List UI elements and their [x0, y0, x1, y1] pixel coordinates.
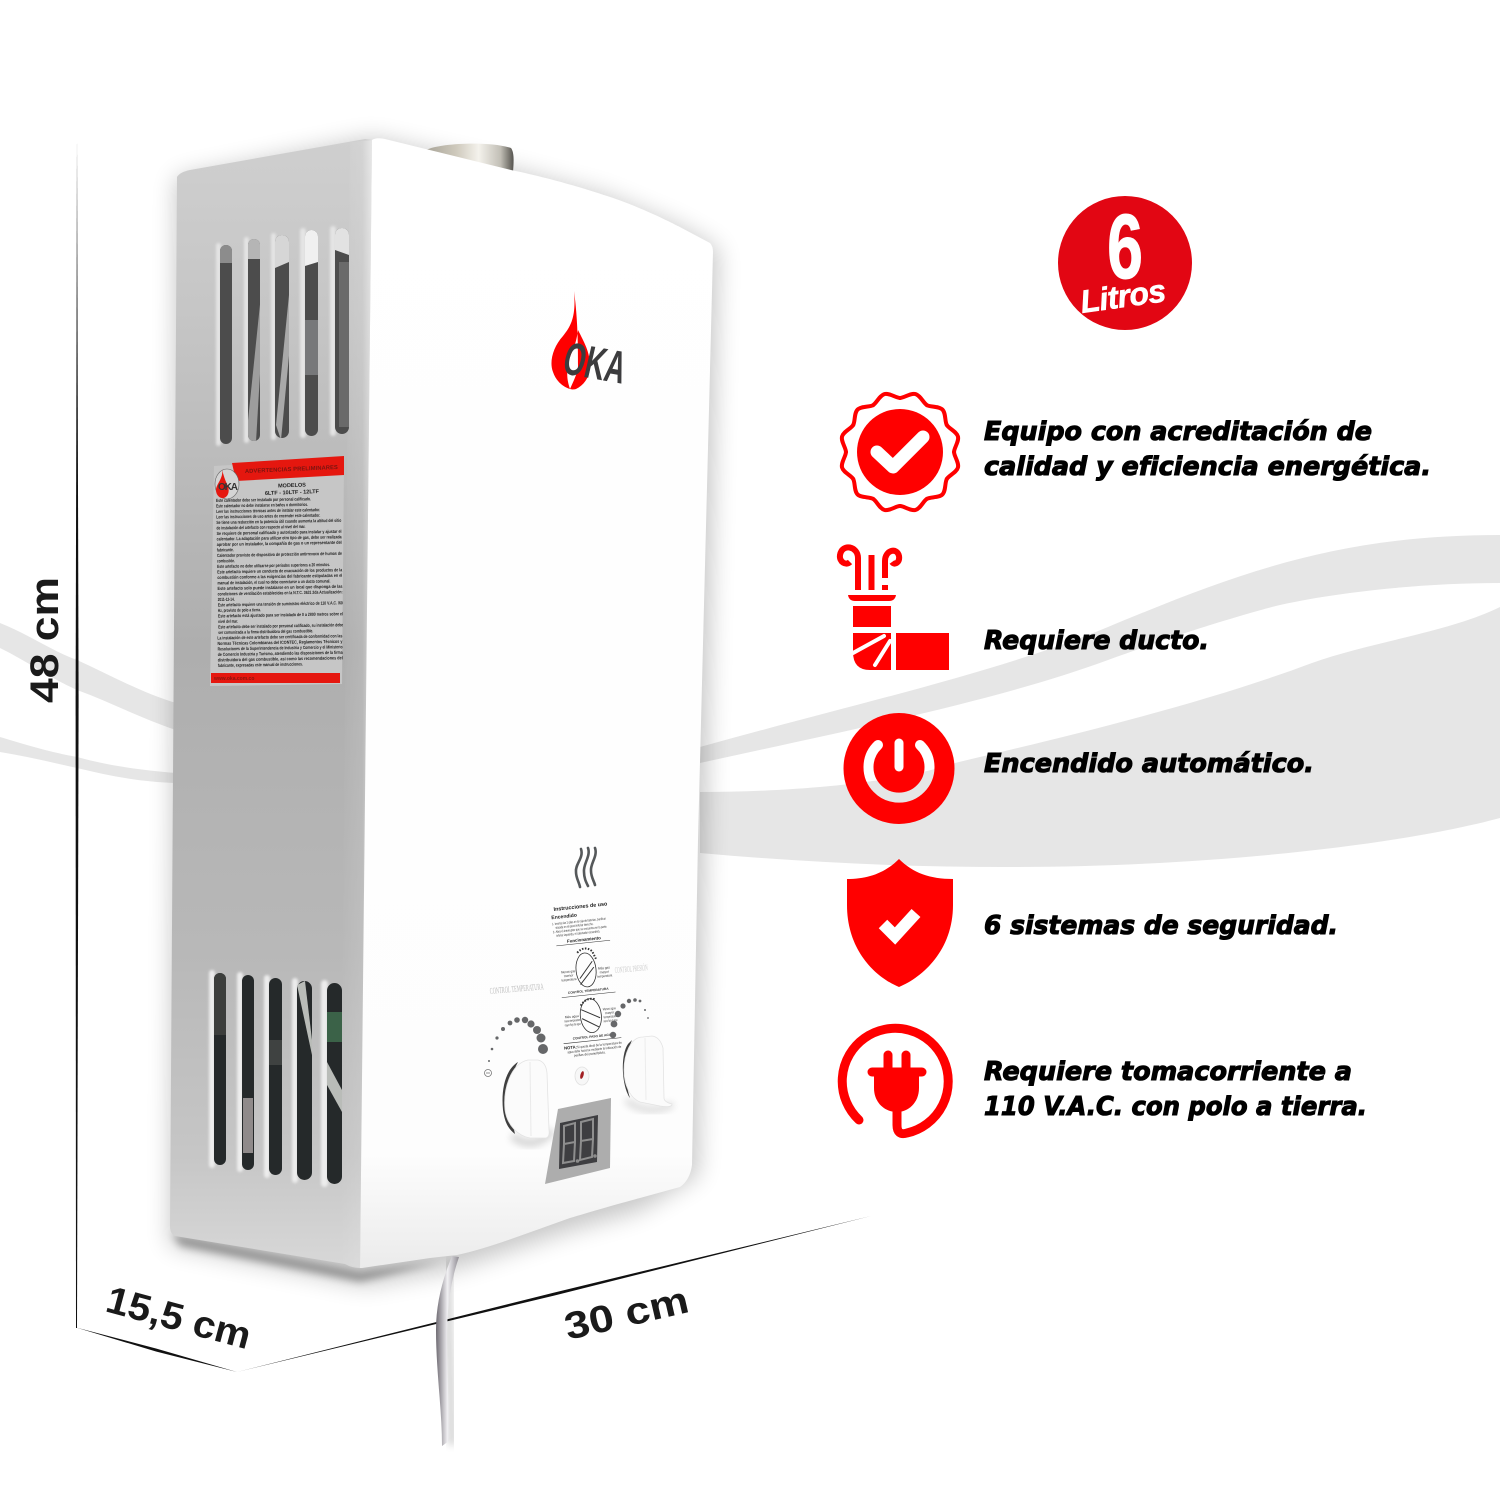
label instructions text: Este calentador debe ser instalado por personal calificado.	[216, 496, 311, 503]
text: power outlet: Requiere tomacorriente a	[984, 1057, 1352, 1087]
label instructions text: nivel del mar.	[218, 619, 238, 624]
capacity badge: 6 Litros	[1058, 195, 1192, 330]
feature: duct	[840, 547, 1209, 670]
label red footer: www.oka.com.co	[213, 676, 254, 682]
feature: safety	[847, 859, 1338, 987]
label instructions text: combustión conforme a las exigencias del fabricante estipuladas en el	[217, 573, 342, 580]
label instructions text: condiciones de ventilación establecidas en la N.T.C. 3631 2da Actualización:	[218, 589, 343, 596]
vent slots	[220, 228, 349, 444]
temperature dial	[557, 946, 616, 998]
text: quality: Equipo con acreditación de	[984, 417, 1372, 447]
operation heading: Funcionamiento	[567, 935, 601, 944]
label logo	[215, 469, 239, 499]
water dial: menor temperatura	[564, 1018, 580, 1023]
label models	[265, 483, 320, 497]
digital display	[545, 1098, 611, 1184]
hose and reflections seen through vents	[220, 228, 349, 442]
background: grey swooshes right	[700, 535, 1500, 867]
label red footer	[211, 673, 340, 683]
label instructions text: Este artefacto solo puede instalarse en un local que disponga de las	[217, 584, 343, 591]
ignition text: inferior izquierda, el calentador encenderá.	[556, 929, 600, 938]
icon: plug	[842, 1028, 948, 1134]
warning label	[210, 456, 344, 686]
label instructions text: distribuidora del gas combustible, así como las recomendaciones del	[218, 655, 343, 662]
water heater	[170, 138, 713, 1268]
label instructions text: calentador. La adaptación para utilizar otro tipo de gas, debe ser realizada	[217, 534, 342, 541]
water heater: CONTROL PRESIÓN	[614, 962, 648, 975]
right dial dots	[610, 998, 649, 1038]
icon: shield	[847, 859, 953, 987]
ignition text: 2- Abra el interruptor que se encuentra en la parte	[553, 925, 607, 934]
flame	[551, 291, 590, 389]
label red header	[232, 456, 344, 481]
left dial dots	[488, 1017, 548, 1062]
ignition text: Encendido	[551, 913, 577, 921]
label instructions text: combustión.	[217, 558, 235, 563]
power cable	[436, 1256, 459, 1446]
label instructions text: La instalación de este artefacto debe ser certificada de conformidad con las	[217, 633, 343, 640]
label instructions text: de Comercio Industria y Turismo, atendiendo las disposiciones de la firma	[218, 650, 343, 657]
label instructions text: fabricante, expresadas este manual de instrucciones.	[218, 662, 303, 668]
note text: NOTA:	[564, 1044, 577, 1051]
bottom vents	[209, 970, 342, 1187]
right knob	[623, 1036, 673, 1110]
side edge highlight	[340, 140, 372, 1268]
indicator light	[575, 1067, 589, 1085]
water heater: CONTROL TEMPERATURA	[489, 981, 544, 996]
heater shadow	[170, 138, 718, 1285]
ignition text: situada en el panel inferior derecho.	[555, 922, 594, 930]
dimension line: depth	[76, 1328, 237, 1372]
dimension label: 48 cm: 48 cm	[23, 577, 67, 703]
temperature dial: mayor	[599, 969, 610, 975]
label instructions text: Hz, provisto de polo a tierra.	[218, 607, 261, 613]
label instructions text: Se requiere de personal calificado y autorizado para instalar y ajustar el	[217, 529, 342, 536]
front panel	[360, 138, 713, 1268]
temperature dial: temperatura	[597, 973, 613, 979]
water dial: mayor flujo de agua	[565, 1022, 581, 1027]
label logo: OKA	[218, 482, 238, 493]
label instructions text: Este artefacto no debe utilizarse por periodos superiores a 20 minutos.	[217, 562, 330, 569]
icon: quality seal	[827, 379, 973, 525]
label instructions text: Este artefacto requiere una tensión de suministro eléctrico de 110 V.A.C. /60	[218, 600, 343, 607]
label header text: ADVERTENCIAS PRELIMINARES	[245, 465, 338, 475]
dimension label: 30 cm: 30 cm	[561, 1280, 693, 1349]
label instructions text: Leer las instrucciones técnicas antes de instalar este calentador.	[216, 507, 320, 514]
label instructions text: ser comunicada a la firma distribuidora del gas combustible.	[218, 628, 313, 635]
vent bevels	[209, 970, 328, 1187]
label instructions text: 2011-12-14.	[218, 597, 235, 602]
operation heading	[556, 934, 610, 946]
note text: agua debe hacerse mediante la indicación de	[567, 1045, 622, 1054]
side panel	[170, 139, 372, 1268]
note text: Si queda ideal de la temperatura de	[577, 1041, 622, 1049]
capacity badge: 6 Litros: Litros	[1078, 272, 1168, 320]
water dial: Más agua	[565, 1014, 579, 1019]
panel heading: Instrucciones de uso	[553, 901, 608, 913]
capacity badge: 6 Litros: 6	[1107, 195, 1143, 298]
label instructions text: de instalación del artefacto con respecto al nivel del mar.	[216, 524, 305, 530]
label instructions text: aprobar por un instalador, la compañía de gas o un representante del	[217, 540, 342, 547]
vent slots	[214, 973, 342, 1184]
dimension label: 15,5 cm: 15,5 cm	[102, 1279, 255, 1358]
label instructions text: Resoluciones de la Superintendencia de Industria y Comercio y el Ministerio	[218, 644, 343, 651]
temperature dial: menor	[564, 973, 574, 978]
water dial	[559, 996, 621, 1044]
usage instructions panel	[549, 901, 624, 1059]
label instructions text: fabricante.	[217, 547, 234, 552]
text: automatic ignition: Encendido automático.	[984, 749, 1314, 779]
water dial: menor flujo de agua	[603, 1018, 618, 1023]
temperature dial: temperatura	[561, 977, 577, 983]
temperature dial: Menos gas	[561, 969, 576, 975]
icon: duct	[840, 547, 949, 670]
label instructions text: Este artefacto requiere un conducto de evacuación de los productos de la	[217, 567, 343, 574]
left knob	[503, 1060, 552, 1143]
feature: quality	[827, 379, 1431, 525]
water dial: Menos agua	[603, 1006, 616, 1011]
label instructions text: Se tiene una reducción en la potencia útil cuando aumenta la altitud del sitio	[216, 518, 342, 525]
label instructions text: Este artefacto está ajustado para ser instalado de 0 a 2800 metros sobre el	[218, 611, 343, 618]
brand logo: OKA	[551, 291, 632, 394]
water dial: mayor	[605, 1010, 615, 1015]
feature: automatic ignition	[844, 713, 1314, 824]
label instructions text: Normas Técnicas Colombianas del ICONTEC, Reglamentos Técnicos y	[217, 639, 343, 646]
display digits	[563, 1119, 596, 1163]
dimension line: width	[237, 1216, 871, 1372]
background: grey swooshes left	[0, 623, 176, 783]
steam symbol	[576, 848, 596, 887]
label models: 6LTF - 10LTF - 12LTF	[265, 489, 320, 497]
water dial: CONTROL PASO DE AGUA	[573, 1032, 614, 1041]
temperature dial: CONTROL TEMPERATURA	[568, 987, 609, 995]
text: power outlet	[984, 1057, 1367, 1122]
text: safety: 6 sistemas de seguridad.	[984, 911, 1338, 941]
label instructions text: manual de instalación, el cual no debe conectarse a un ducto comunal.	[217, 579, 330, 585]
temperature dial: Más gas	[598, 965, 610, 971]
icon: power	[844, 713, 954, 824]
label instructions text: Leer las instrucciones de uso antes de encender este calentador.	[216, 513, 320, 519]
feature: power outlet	[842, 1028, 1367, 1134]
text: power outlet: 110 V.A.C. con polo a tierra.	[984, 1092, 1367, 1122]
text: quality	[984, 417, 1431, 482]
dimension line: height	[76, 138, 79, 1328]
label background	[210, 458, 344, 686]
ignition text	[551, 910, 608, 938]
exhaust pipe	[426, 144, 514, 172]
ignition text: 1- Insertar las 2 pilas en la caja de baterías, (verificar	[552, 917, 607, 926]
label instructions text: Este artefacto debe ser instalado por personal calificado, su instalación debe	[218, 622, 344, 629]
text: quality: calidad y eficiencia energética.	[984, 452, 1431, 482]
wordmark: OKA	[559, 332, 632, 394]
minus symbol	[484, 1070, 492, 1076]
text: duct: Requiere ducto.	[984, 626, 1209, 656]
label instructions text	[215, 496, 344, 668]
note text: perillas del panel/piloto.	[574, 1050, 606, 1058]
top vents	[216, 226, 349, 446]
water dial: temperatura	[603, 1014, 617, 1019]
hoses and parts seen through vents	[214, 973, 342, 1153]
note text	[564, 1040, 623, 1059]
label instructions text: Este calentador no debe instalarse en baños o dormitorios.	[216, 502, 308, 508]
label models: MODELOS	[278, 483, 306, 489]
vent bevels	[216, 226, 336, 446]
label instructions text: Calentador provisto de dispositivo de protección antirrevoco de humos de	[217, 551, 342, 558]
